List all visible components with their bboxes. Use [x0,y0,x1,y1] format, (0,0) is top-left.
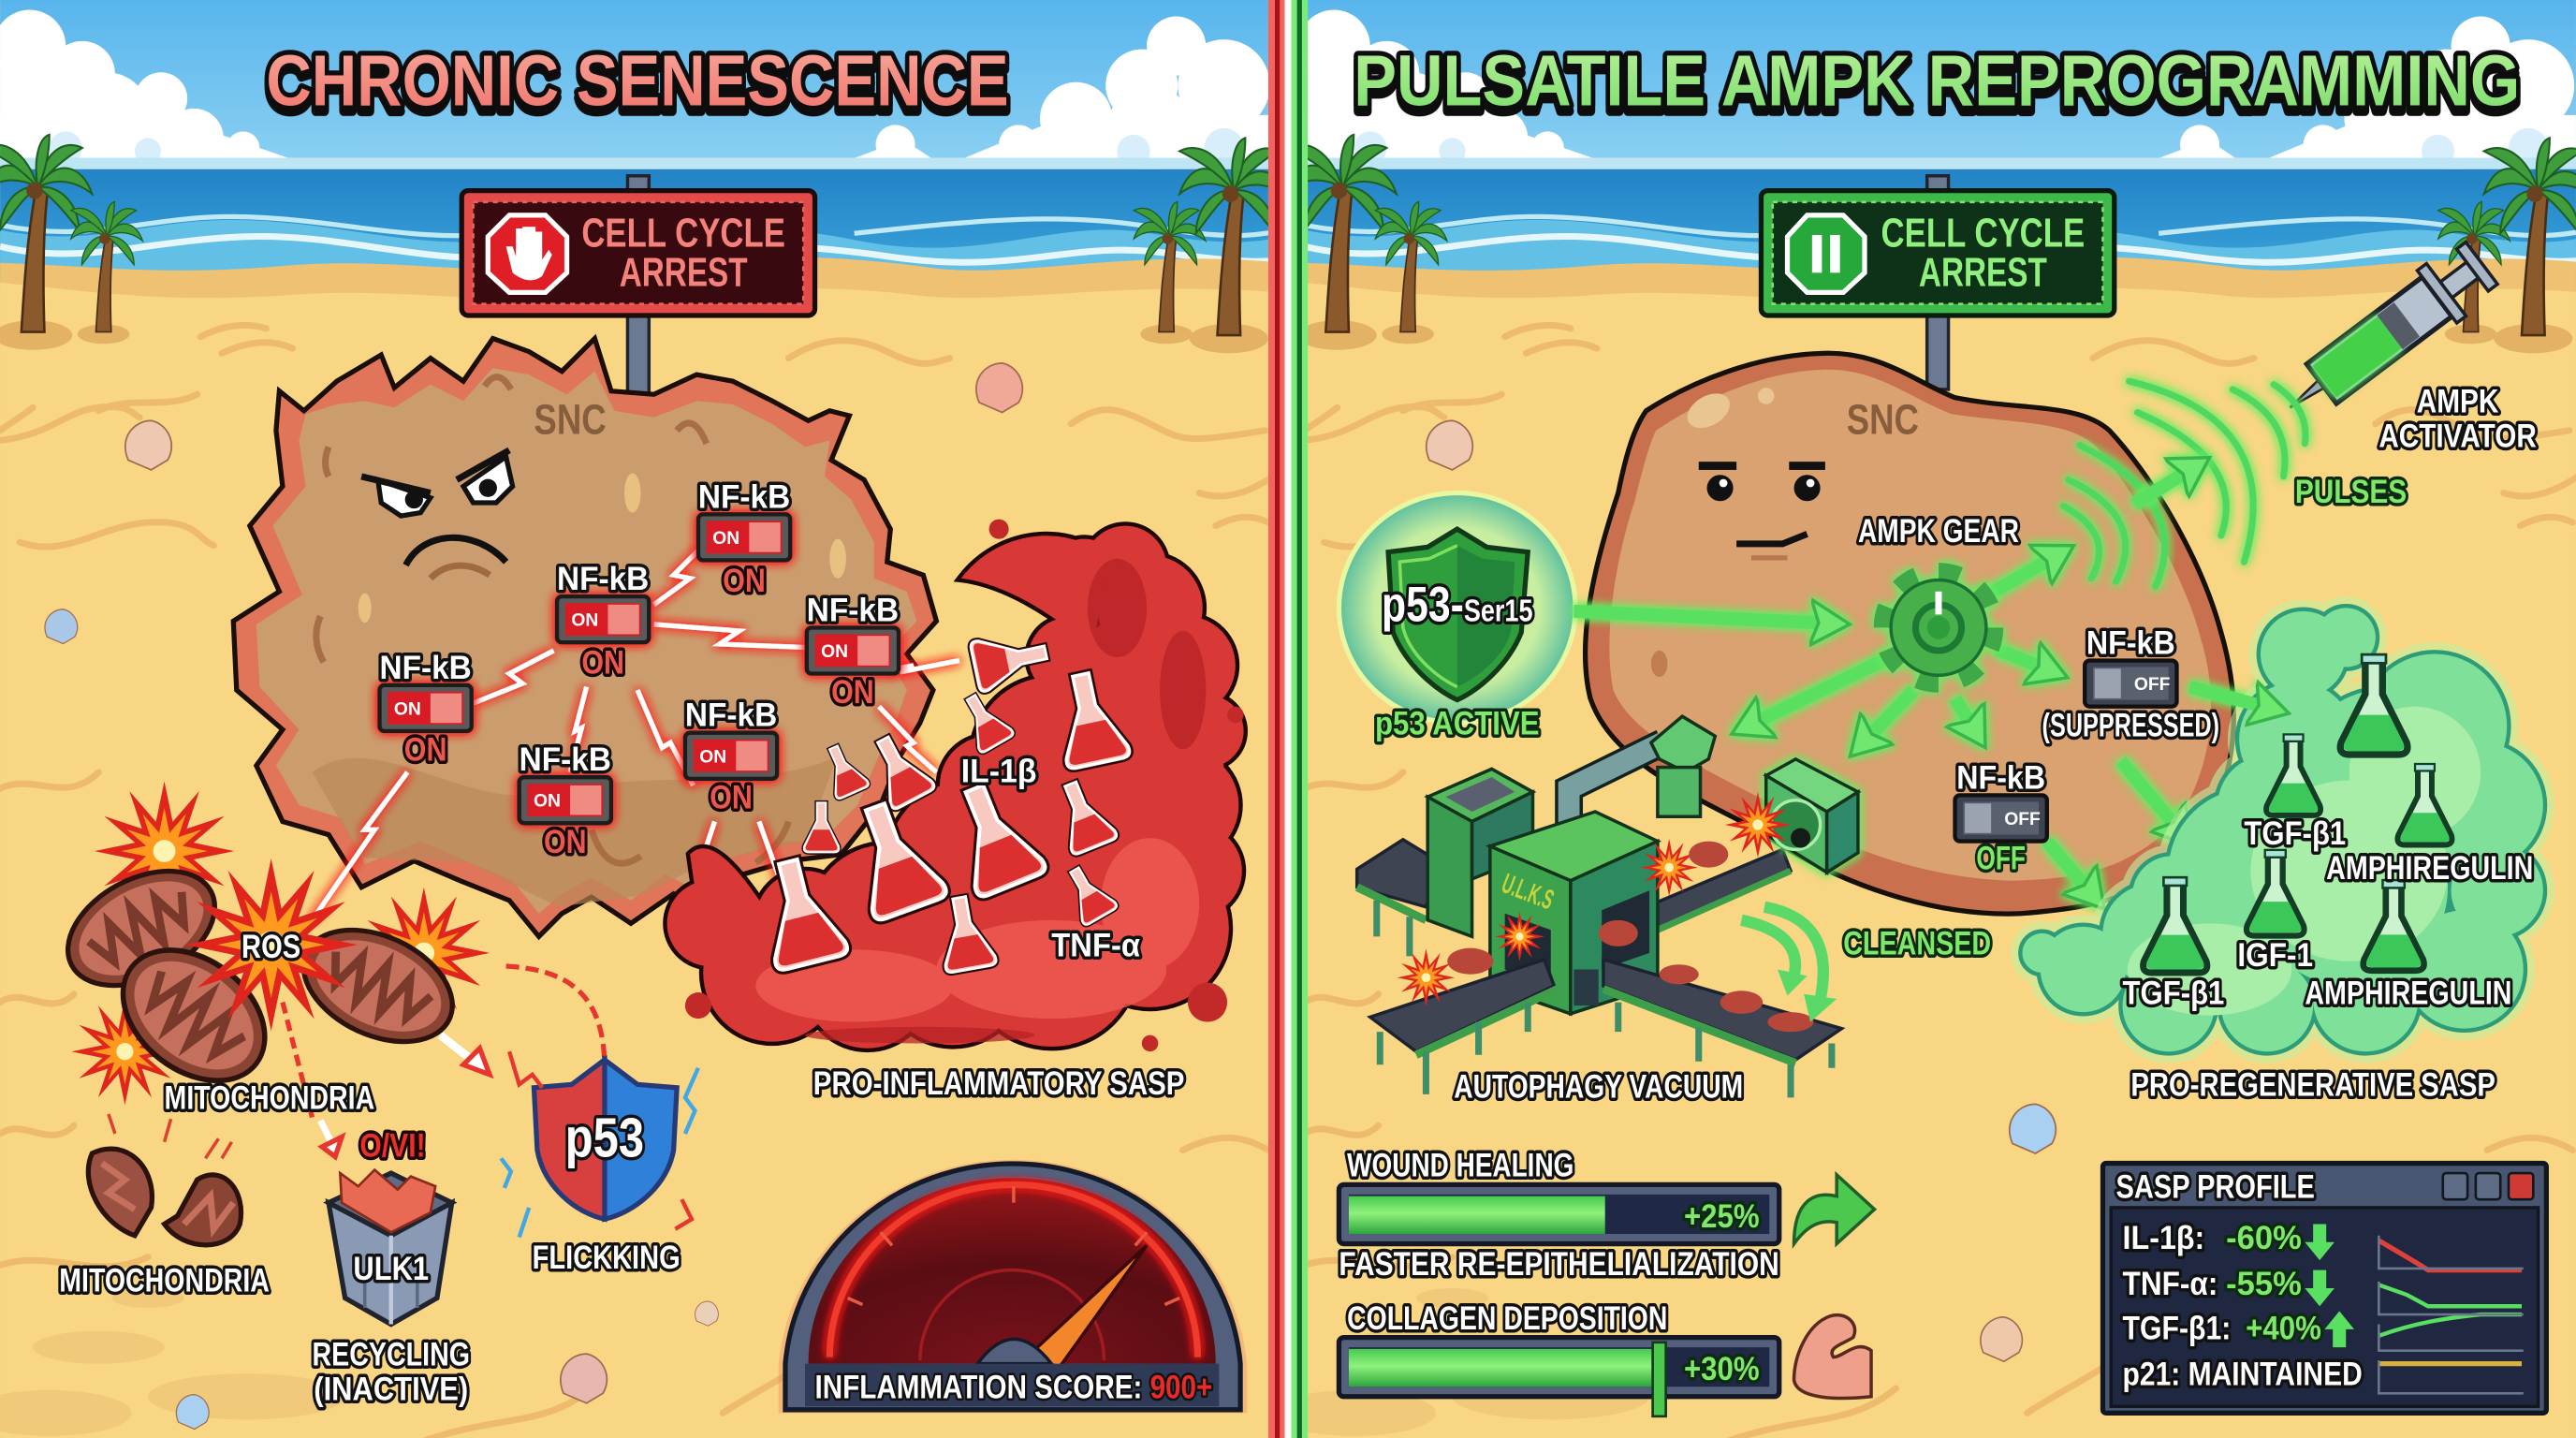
beach shells right [1427,420,2056,1361]
red signal lightning network [313,550,959,920]
red dashed arrows from mitochondria [283,966,605,1157]
p53-Ser15 bubble and shield: p53-Ser15 [1382,577,1532,632]
switch 4: ON [394,699,421,719]
label: AMPK activator [2378,384,2537,454]
trash can ULK1: ULK1 [353,1251,429,1287]
neutral face [1699,462,1825,560]
label: TNF-alpha: TNF-α [1051,927,1140,963]
NF-kB switches [379,478,899,860]
switch 1: ON [712,529,739,549]
wound healing bar: +25% [1684,1198,1760,1235]
switch 2: NF-kB [557,561,649,597]
damaged mitochondria with ROS [49,782,490,1108]
window buttons [2443,1173,2533,1199]
row p21: p21: MAINTAINED [2123,1356,2363,1392]
angry face [361,450,513,579]
AMPK gear [1882,572,1995,683]
autophagy factory: U.L.K.S [1498,868,1558,916]
label: mitochondria lower: MITOCHONDRIA [59,1262,270,1299]
trash can ULK1 [329,1170,452,1325]
switch 1: ON [723,563,766,599]
label: IL-1beta: IL-1β [961,753,1036,789]
NF-kB off switch: OFF [2004,810,2041,829]
pulse waves [2063,381,2305,587]
tower [1427,769,1532,822]
beach shells left [45,363,1022,1430]
icon: flexed arm [1794,1315,1871,1399]
label: pro-regenerative SASP: PRO-REGENERATIVE SASP [2130,1067,2496,1104]
center divider [1268,0,1308,1438]
SASP profile window [2102,1164,2546,1413]
red droplets [685,520,1244,1051]
sign: cell cycle arrest pause: CELL CYCLE [1881,210,2085,256]
background: right beach panel [1271,0,2576,1438]
p53 flickering shield: p53 [565,1107,644,1169]
row TGF-beta1 [2123,1310,2522,1347]
sign post [627,176,649,398]
background: left beach panel [0,0,1314,1438]
flasks of inflammatory factors [753,627,1131,974]
label: recycling inactive [313,1336,470,1407]
healthy-looking cell [1586,353,2233,914]
label: recycling inactive: (INACTIVE) [314,1371,468,1407]
switch 5: NF-kB [520,741,611,778]
switch 1: NF-kB [698,478,790,515]
green SASP cloud [2022,608,2543,1051]
pipe [1569,742,1662,829]
label: TGF-b1 lower: TGF-β1 [2123,975,2224,1011]
regenerative flasks [2144,654,2452,973]
sign: cell cycle arrest stop [461,191,815,315]
row IL-1beta [2123,1220,2522,1270]
label: warning: O/VI! [359,1128,426,1165]
NF-kB suppressed switch: NF-kB [2086,625,2175,662]
switch 3: ON [831,674,874,711]
switch 5: ON [534,792,561,812]
switch 2: ON [571,611,598,631]
row TGF-beta1: +40% [2246,1310,2321,1346]
arrow into cloud [2190,687,2257,705]
label: amphiregulin lower: AMPHIREGULIN [2305,975,2511,1011]
label: p53 active: p53 ACTIVE [1375,705,1540,741]
autophagy factory [1357,716,1858,1097]
label: IGF-1: IGF-1 [2237,937,2313,974]
broken mitochondria [88,1114,242,1245]
row IL-1beta: -60% [2226,1220,2302,1256]
NF-kB off switch: OFF [1976,840,2026,876]
row TNF-alpha [2123,1266,2522,1306]
label: TGF-b1: TGF-β1 [2244,815,2346,852]
p53 flickering shield [501,1051,698,1238]
title: chronic senescence: CHRONIC SENESCENCE [266,40,1009,121]
row TNF-alpha: -55% [2226,1266,2302,1302]
inflammation gauge: INFLAMMATION SCORE: 900+ [815,1370,1212,1406]
switch 2 [557,561,649,682]
label: pro-inflammatory SASP: PRO-INFLAMMATORY SASP [813,1065,1184,1102]
switch 6: NF-kB [685,697,777,734]
switch 6: ON [710,779,753,815]
switch 3 [807,592,899,711]
damaged mitochondria with ROS: ROS [242,929,300,965]
label: cleansed: CLEANSED [1843,926,1991,962]
NF-kB suppressed switch: (SUPPRESSED) [2042,707,2219,743]
switch 4: ON [404,732,446,769]
switch 2: ON [581,645,624,682]
debris on belts [1398,949,1455,1006]
label: recycling inactive: RECYCLING [313,1336,470,1372]
label: flickking: FLICKKING [533,1240,681,1276]
NF-kB off switch [1955,759,2047,876]
switch 1 [698,478,790,599]
wound healing bar [1339,1148,1779,1244]
row IL-1beta: IL-1β: [2123,1220,2204,1256]
label: pulses: PULSES [2295,474,2407,510]
switch 6: ON [699,747,726,767]
label: AMPK activator: ACTIVATOR [2378,418,2537,454]
sign: cell cycle arrest pause: ARREST [1919,249,2047,295]
back conveyors [1357,840,1432,907]
panel: chronic senescence [45,40,1247,1430]
collagen deposition bar [1339,1300,1779,1416]
inflammation gauge [779,1160,1247,1413]
cleansed arrows [1741,907,1823,999]
collagen deposition bar: COLLAGEN DEPOSITION [1347,1300,1667,1337]
main block [1490,812,1658,881]
panel: pulsatile AMPK reprogramming [1339,40,2546,1416]
switch 3: ON [821,642,848,662]
NF-kB suppressed switch: OFF [2134,675,2171,695]
switch 4 [379,650,472,769]
senescent cell blob [233,339,936,936]
row TGF-beta1: TGF-β1: [2123,1310,2231,1346]
sign: cell cycle arrest pause [1761,191,2115,315]
vacuum unit [1766,759,1858,873]
label: mitochondria: MITOCHONDRIA [165,1080,374,1117]
switch 3: NF-kB [807,592,899,628]
switch 4: NF-kB [379,650,472,686]
row TNF-alpha: TNF-α: [2123,1266,2217,1302]
icon: curved arrow [1794,1175,1875,1244]
label: AMPK gear: AMPK GEAR [1858,513,2019,550]
sign: cell cycle arrest stop: ARREST [620,249,748,295]
p53-Ser15 bubble and shield [1339,493,1575,723]
switch 6 [685,697,777,815]
front conveyors [1370,960,1554,1051]
syringe AMPK activator [2270,237,2501,433]
switch 5: ON [544,824,587,860]
sign: cell cycle arrest stop: CELL CYCLE [581,210,785,256]
label: autophagy vacuum: AUTOPHAGY VACUUM [1454,1068,1743,1105]
sign post [1927,176,1949,389]
label: faster re-epithelialization: FASTER RE-EPITHELIALIZATION [1339,1246,1779,1283]
green arrows from gear [1573,475,2257,884]
switch 5 [520,741,611,860]
label: SNC: SNC [1847,395,1919,443]
NF-kB off switch: NF-kB [1956,759,2045,796]
collagen deposition bar: +30% [1684,1351,1760,1387]
label: SNC: SNC [534,395,607,443]
label: amphiregulin: AMPHIREGULIN [2326,850,2533,887]
wound healing bar: WOUND HEALING [1347,1148,1573,1184]
SASP profile window: SASP PROFILE [2116,1168,2315,1205]
red SASP cloud [667,520,1244,1051]
NF-kB suppressed switch [2042,625,2219,743]
label: AMPK activator: AMPK [2417,384,2499,420]
